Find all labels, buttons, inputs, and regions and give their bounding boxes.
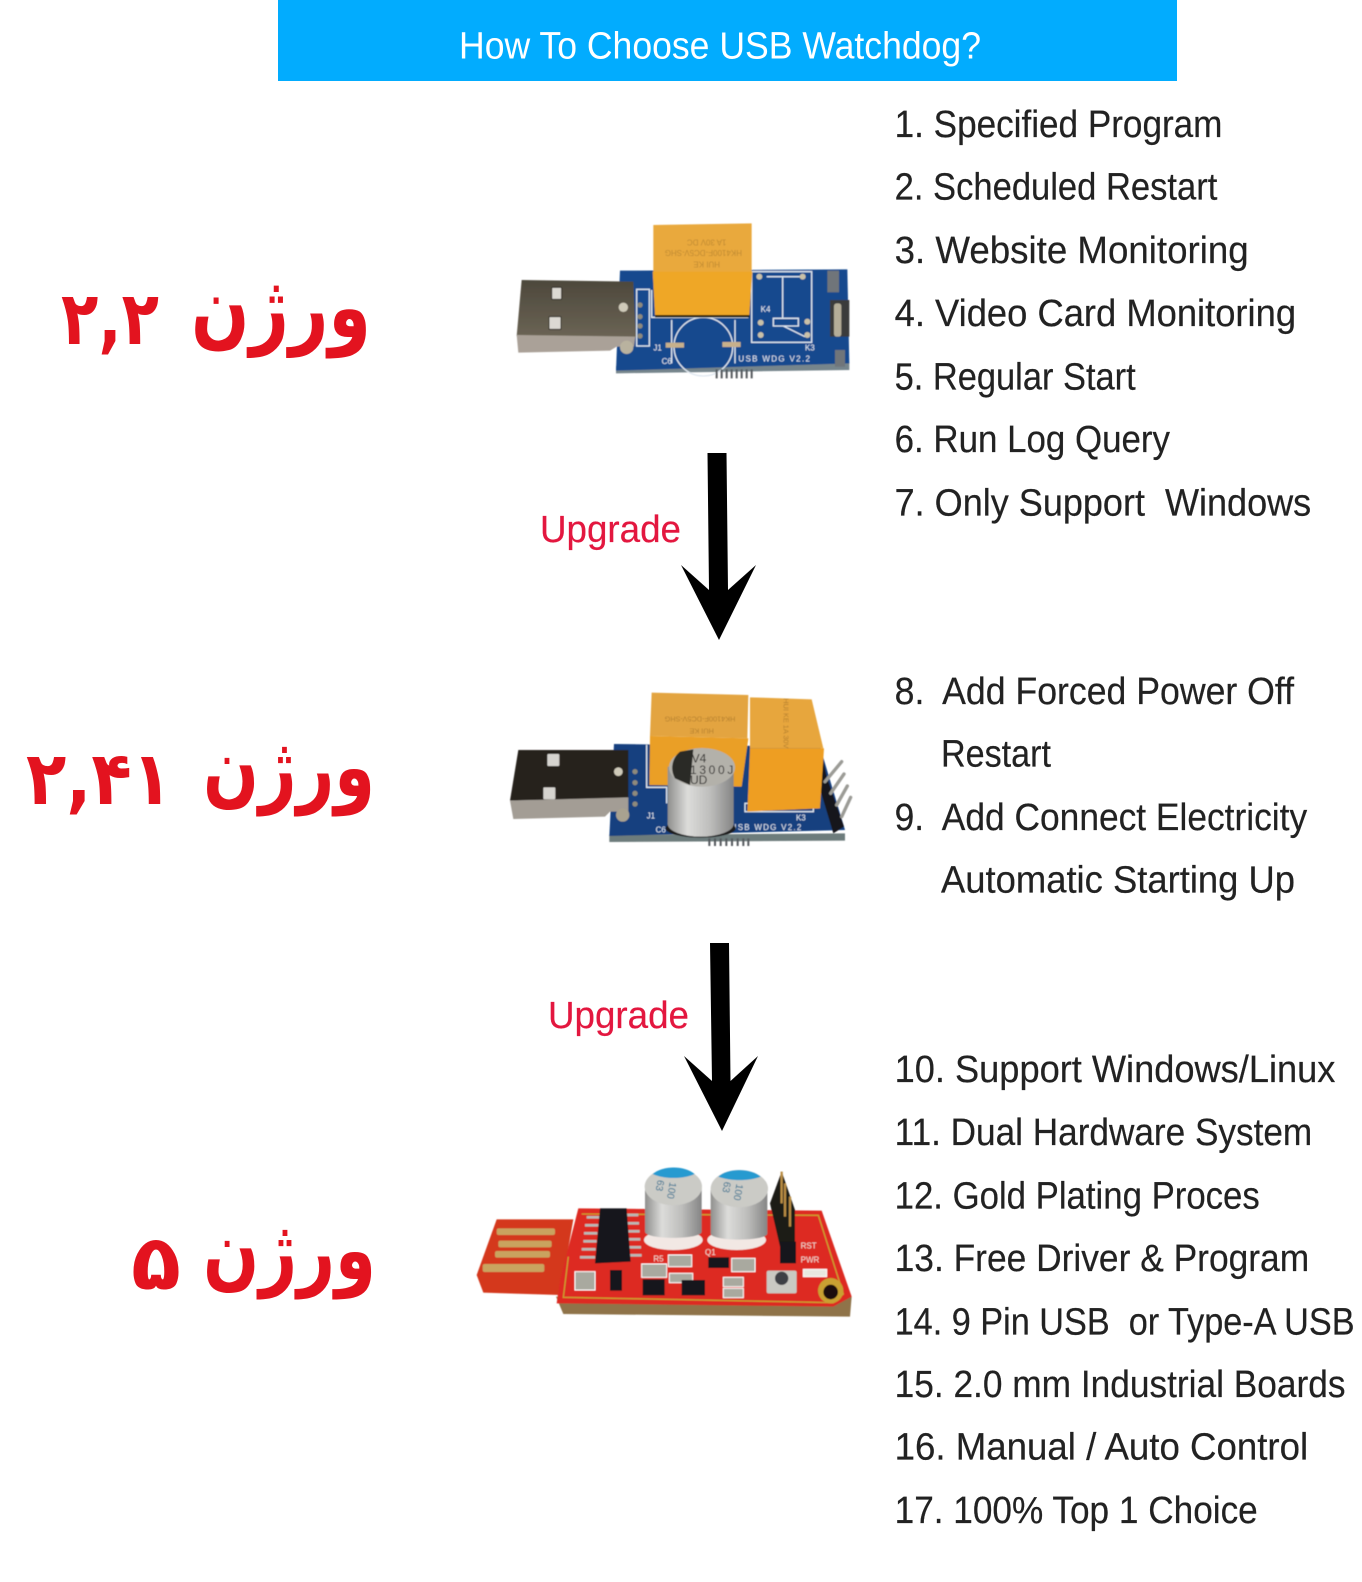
version label: 5: ۵ bbox=[131, 1218, 181, 1307]
feature list: v5: 10. Support Windows/Linux bbox=[895, 1049, 1335, 1091]
feature list: v2.2: 7. Only Support Windows bbox=[895, 482, 1311, 524]
feature list: v5: 16. Manual / Auto Control bbox=[895, 1426, 1308, 1468]
upgrade label 1: Upgrade bbox=[540, 509, 681, 551]
feature list: v5: 17. 100% Top 1 Choice bbox=[895, 1490, 1258, 1532]
feature list: v2.2: 2. Scheduled Restart bbox=[895, 167, 1218, 209]
product photo: watchdog v2.41 bbox=[510, 693, 851, 846]
product photo: watchdog v5: 63 bbox=[719, 1181, 732, 1194]
feature list: v5: 13. Free Driver & Program bbox=[895, 1238, 1309, 1280]
feature list: v2.2: 3. Website Monitoring bbox=[895, 230, 1249, 272]
product photo: watchdog v5: 100 bbox=[731, 1183, 744, 1202]
feature list: v2.2: 1. Specified Program bbox=[895, 104, 1222, 146]
product photo: watchdog v5: PWR bbox=[801, 1256, 820, 1265]
product photo: watchdog v2.2: 1A 30V DC bbox=[687, 237, 726, 246]
product photo: watchdog v2.41: C6 bbox=[656, 825, 666, 834]
product photo: watchdog v5: R5 bbox=[653, 1255, 664, 1264]
feature list: v2.41: Automatic Starting Up bbox=[941, 860, 1295, 902]
product photo: watchdog v5: RST bbox=[801, 1241, 817, 1250]
product photo: watchdog v2.2: HUI KE bbox=[693, 260, 720, 269]
title banner: How To Choose USB Watchdog? bbox=[459, 26, 981, 68]
product photo: watchdog v5: 100 bbox=[664, 1181, 678, 1200]
product photo: watchdog v2.41: HUI KE 1A 30V bbox=[781, 698, 790, 748]
version label: 5: ورژن bbox=[203, 1201, 376, 1300]
version label: 2.2 bbox=[61, 256, 371, 362]
upgrade label 2: Upgrade bbox=[548, 995, 689, 1037]
feature list: v5 bbox=[895, 1049, 1355, 1532]
product photo: watchdog v2.2: K3 bbox=[805, 344, 815, 353]
product photo: watchdog v2.2 bbox=[517, 223, 849, 378]
product photo: watchdog v2.2: K4 bbox=[761, 305, 771, 314]
product photo: watchdog v2.2: USB WDG V2.2 bbox=[738, 354, 811, 363]
version label: 2.2: ورژن bbox=[191, 256, 371, 359]
version label: 5 bbox=[131, 1201, 376, 1307]
feature list: v5: 12. Gold Plating Proces bbox=[895, 1175, 1260, 1217]
product photo: watchdog v2.41: J1 bbox=[647, 811, 656, 820]
product photo: watchdog v2.2: J1 bbox=[653, 344, 662, 353]
feature list: v2.41: 8. Add Forced Power Off bbox=[895, 671, 1294, 713]
version label: 2.41: ۲,۴۱ bbox=[26, 736, 172, 822]
feature list: v2.2 bbox=[895, 104, 1311, 524]
product photo: watchdog v2.41: V4 bbox=[692, 752, 707, 766]
product photo: watchdog v2.2: C6 bbox=[662, 357, 672, 366]
product photo: watchdog v5: 63 bbox=[653, 1179, 666, 1192]
product photo: watchdog v2.41: USB WDG V2.2 bbox=[731, 823, 802, 832]
upgrade arrow 2 bbox=[684, 943, 758, 1131]
feature list: v2.41: 9. Add Connect Electricity bbox=[895, 797, 1307, 839]
feature list: v2.41 bbox=[895, 671, 1307, 902]
feature list: v2.2: 5. Regular Start bbox=[895, 356, 1136, 398]
product photo: watchdog v2.41: HK4100F-DC5V-SHG bbox=[664, 715, 735, 724]
product photo: watchdog v5: Q1 bbox=[705, 1248, 716, 1257]
product photo: watchdog v2.41: HUI KE bbox=[689, 726, 714, 735]
feature list: v5: 11. Dual Hardware System bbox=[895, 1112, 1312, 1154]
product photo: watchdog v5 bbox=[477, 1167, 852, 1317]
feature list: v2.41: Restart bbox=[941, 734, 1051, 776]
version label: 2.41: ورژن bbox=[203, 718, 375, 817]
version label: 2.41 bbox=[26, 718, 375, 822]
feature list: v2.2: 4. Video Card Monitoring bbox=[895, 293, 1296, 335]
product photo: watchdog v2.41: 1300J bbox=[690, 763, 733, 777]
product photo: watchdog v2.41: UD bbox=[690, 773, 708, 787]
product photo: watchdog v2.41: K3 bbox=[796, 814, 806, 823]
upgrade arrow 1 bbox=[681, 453, 756, 640]
product photo: watchdog v2.2: HK4100F-DC5V-SHG bbox=[665, 248, 742, 257]
title banner bbox=[278, 0, 1177, 81]
version label: 2.2: ۲,۲ bbox=[61, 276, 159, 362]
feature list: v2.2: 6. Run Log Query bbox=[895, 419, 1170, 461]
